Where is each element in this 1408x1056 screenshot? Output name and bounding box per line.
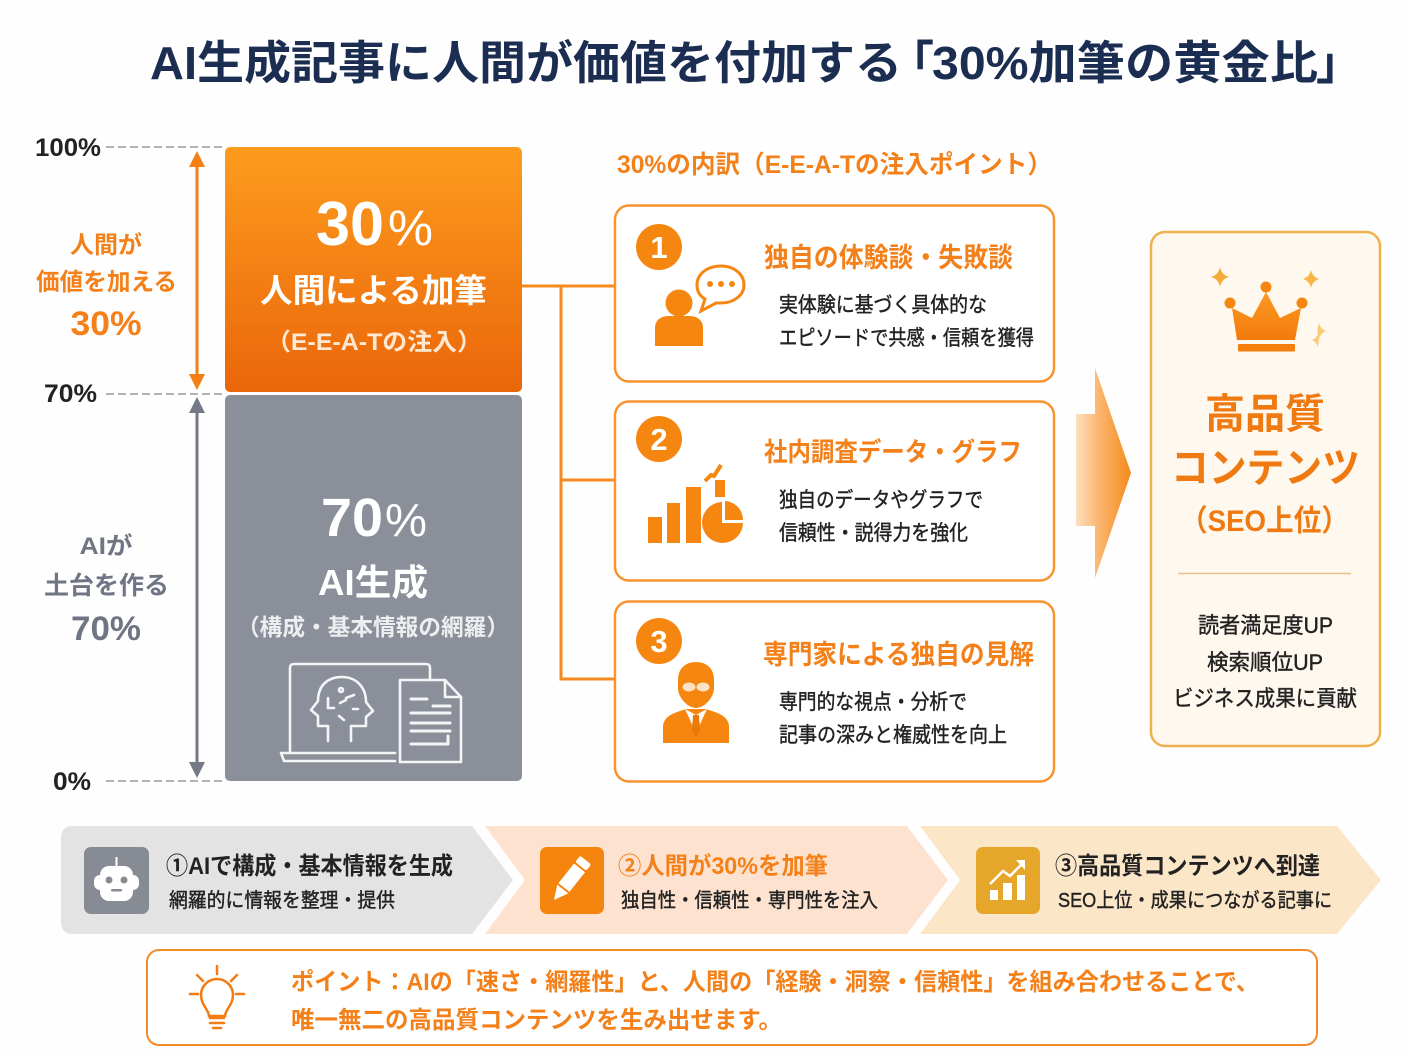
icon: light bulb — [190, 966, 244, 1028]
panel: high quality content: 読者満足度UP — [1198, 613, 1333, 638]
panel: AI 70% block: （構成・基本情報の網羅） — [237, 614, 509, 640]
icon: rising chart — [976, 847, 1040, 914]
title: 30%加筆の黄金比 — [932, 37, 1318, 89]
panel: card 3: 専門的な視点・分析で — [779, 691, 967, 714]
panel: AI 70% block: AI生成 — [318, 562, 428, 603]
step 1 chevron — [61, 826, 513, 934]
label: human adds value 30%: 30% — [70, 305, 142, 343]
icon: number 2: 2 — [650, 422, 668, 457]
step 1 chevron: 網羅的に情報を整理・提供 — [169, 889, 395, 912]
panel: human 30% block: % — [388, 200, 433, 256]
step 2 chevron: ②人間が30%を加筆 — [618, 852, 828, 880]
step 2 chevron: 独自性・信頼性・専門性を注入 — [621, 889, 878, 912]
connector lines — [522, 286, 615, 679]
label: human adds value 30%: 人間が — [70, 231, 142, 259]
icon: pencil — [540, 847, 604, 914]
icon: robot — [84, 847, 149, 914]
title: 」 — [1316, 37, 1362, 89]
icon: number 3 — [636, 618, 682, 664]
panel: card 2 — [615, 402, 1054, 580]
panel: card 2: 独自のデータやグラフで — [779, 489, 983, 512]
axis: percent scale: 100% — [35, 134, 101, 162]
panel: human 30% block: 人間による加筆 — [260, 272, 487, 309]
icon: number 1: 1 — [650, 230, 668, 265]
arrow: AI 70% range — [189, 397, 205, 778]
label: human adds value 30%: 価値を加える — [36, 269, 177, 296]
step 2 chevron — [485, 826, 948, 934]
panel: card 3 — [615, 602, 1054, 782]
icon: number 1 — [636, 224, 682, 270]
panel: AI 70% block: % — [385, 494, 427, 546]
step 3 chevron: ③高品質コンテンツへ到達 — [1055, 853, 1320, 880]
panel: card 3: 専門家による独自の見解 — [763, 640, 1034, 670]
label: AI builds base 70%: 土台を作る — [44, 572, 169, 600]
icon: number 3: 3 — [650, 624, 668, 659]
label: human adds value 30% — [36, 231, 177, 343]
callout: point: 唯一無二の高品質コンテンツを生み出せます。 — [291, 1007, 782, 1034]
step 3 chevron — [920, 826, 1381, 934]
panel: high quality content: 高品質 — [1205, 391, 1325, 437]
step 1 chevron: ①AIで構成・基本情報を生成 — [166, 853, 453, 880]
panel: high quality content: 検索順位UP — [1207, 650, 1323, 675]
panel: high quality content — [1151, 232, 1380, 746]
arrow: human 30% range — [189, 151, 205, 390]
heading: breakdown of 30%: 30%の内訳（E-E-A-Tの注入ポイント） — [617, 151, 1052, 179]
title — [150, 37, 1362, 89]
callout: point: ポイント：AIの「速さ・網羅性」と、人間の「経験・洞察・信頼性」を組み合わせることで、 — [291, 969, 1259, 996]
title: 「 — [888, 37, 934, 89]
arrow: to result — [1076, 368, 1131, 578]
panel: card 3: 記事の深みと権威性を向上 — [779, 724, 1007, 747]
label: AI builds base 70%: 70% — [71, 610, 141, 648]
panel: high quality content: （SEO上位） — [1180, 505, 1349, 538]
label: AI builds base 70%: AIが — [80, 532, 132, 560]
icon: person with speech bubble — [655, 266, 744, 346]
panel: AI 70% block — [225, 395, 522, 781]
icon: crown with sparkles — [1211, 267, 1326, 352]
label: AI builds base 70% — [44, 532, 169, 648]
panel: high quality content: コンテンツ — [1171, 445, 1360, 491]
panel: AI 70% block: 70 — [321, 488, 383, 548]
panel: card 1: 実体験に基づく具体的な — [779, 294, 987, 317]
panel: card 1: 独自の体験談・失敗談 — [764, 243, 1013, 273]
panel: card 1: エピソードで共感・信頼を獲得 — [779, 327, 1034, 350]
panel: card 2: 社内調査データ・グラフ — [764, 437, 1022, 467]
step 3 chevron: SEO上位・成果につながる記事に — [1058, 889, 1332, 912]
icon: number 2 — [636, 416, 682, 462]
icon: laptop with AI head and document — [281, 664, 461, 762]
callout: point — [147, 950, 1317, 1045]
panel: card 1 — [615, 206, 1054, 382]
axis: percent scale: 0% — [53, 768, 91, 796]
panel: human 30% block: （E-E-A-Tの注入） — [266, 329, 482, 356]
axis: percent scale — [35, 134, 225, 796]
title: AI生成記事に人間が価値を付加する — [150, 37, 902, 89]
panel: human 30% block: 30 — [316, 190, 384, 259]
icon: expert with glasses and suit — [663, 662, 729, 743]
panel: human 30% block — [225, 147, 522, 392]
icon: bar and pie chart — [648, 465, 743, 543]
panel: card 2: 信頼性・説得力を強化 — [779, 522, 968, 545]
axis: percent scale: 70% — [44, 380, 97, 408]
panel: high quality content: ビジネス成果に貢献 — [1173, 686, 1357, 711]
